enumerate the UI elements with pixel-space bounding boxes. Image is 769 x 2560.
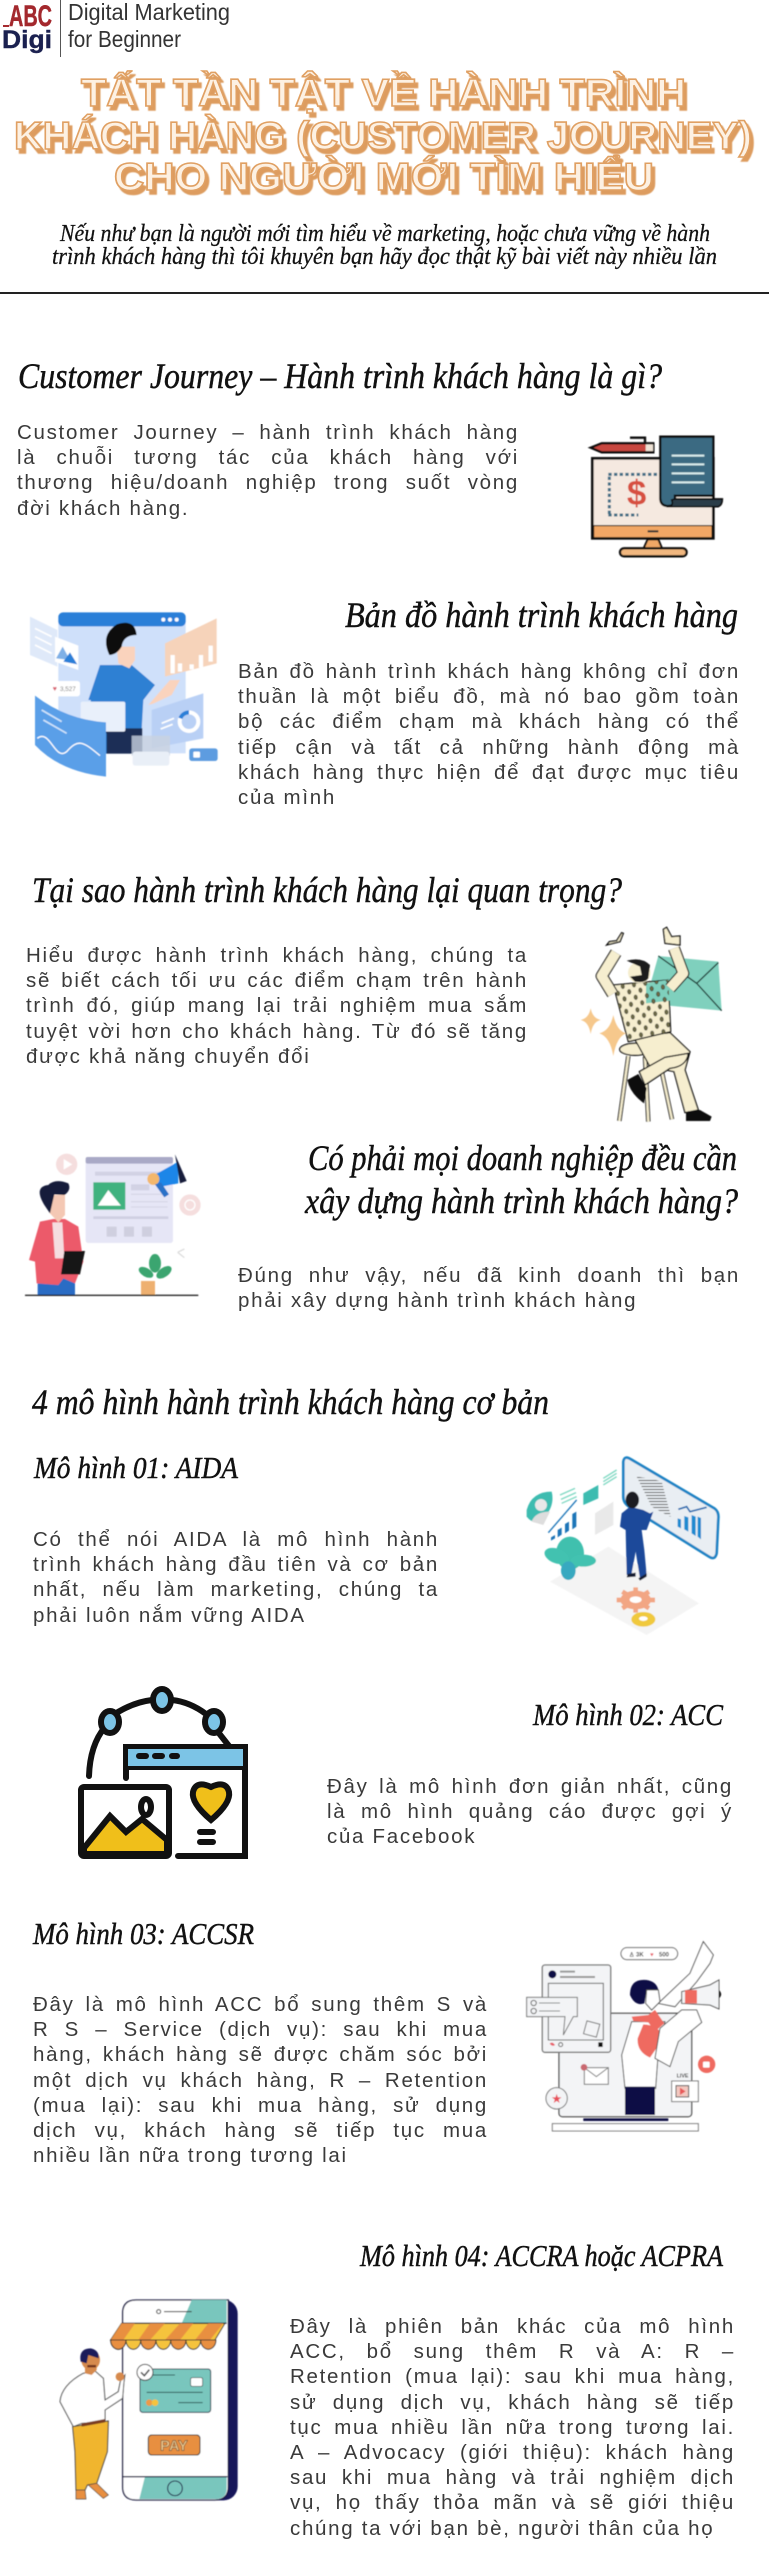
illustration: man with megaphone: ♥ — [650, 1952, 654, 1958]
text: model 02: là mô hình quảng cáo được gợi ý — [327, 1800, 733, 1823]
text: what is customer journey: Customer Journey – hành trình khách hàng — [17, 421, 519, 444]
logo: ABC — [9, 0, 52, 33]
illustration: isometric presenter and board — [527, 1458, 718, 1635]
text: model 01: Có thể nói AIDA là mô hình hành — [33, 1528, 439, 1551]
text: model 03: R S – Service (dịch vụ): sau khi mua — [33, 2018, 488, 2041]
text: why important: được khả năng chuyển đổi — [26, 1045, 311, 1068]
text: model 03: dịch vụ, khách hàng sẽ tiếp tục mua — [33, 2119, 488, 2142]
text: model 04: tục mua nhiều lần nữa trong tương lai. — [290, 2416, 735, 2439]
title: CHO NGƯỜI MỚI TÌM HIỂU — [114, 154, 654, 199]
text: model 01: phải luôn nắm vững AIDA — [33, 1604, 306, 1627]
text: customer journey map — [238, 660, 740, 809]
heading: model 01: Mô hình 01: AIDA — [33, 1450, 239, 1485]
logo — [2, 0, 230, 57]
text: model 04: sau khi mua hàng và trải nghiệm dịch — [290, 2466, 735, 2489]
logo: Digi — [2, 26, 52, 54]
illustration: man with megaphone — [527, 1942, 721, 2131]
illustration: man with megaphone: LIVE — [677, 2074, 689, 2080]
text: customer journey map: của mình — [238, 786, 336, 809]
title: TẤT TẦN TẬT VỀ HÀNH TRÌNH — [81, 71, 686, 115]
text: model 03 — [33, 1993, 488, 2167]
icon: monitor with invoice: $ — [627, 474, 646, 513]
text: model 03: (mua lại): sau khi mua hàng, sử dụng — [33, 2094, 488, 2117]
text: model 04: sử dụng dịch vụ, khách hàng sẽ tiếp — [290, 2391, 735, 2414]
text: model 04: A – Advocacy (giới thiệu): khách hàng — [290, 2441, 735, 2464]
heading: why important: Tại sao hành trình khách hàng lại quan trọng? — [32, 870, 622, 910]
heading: customer journey: Customer Journey – Hành trình khách hàng là gì? — [18, 356, 662, 396]
text: what is customer journey: đời khách hàng. — [17, 497, 189, 520]
text: model 04: Retention (mua lại): sau khi mua hàng, — [290, 2365, 735, 2388]
heading: model 03: Mô hình 03: ACCSR — [32, 1916, 254, 1951]
heading: every business — [304, 1138, 738, 1221]
text: model 03: hàng, khách hàng sẽ được chăm sóc bởi — [33, 2043, 488, 2066]
illustration: man with tablet and web page — [25, 1154, 201, 1296]
header divider — [0, 292, 769, 294]
text: what is customer journey — [17, 421, 519, 520]
text: model 02 — [327, 1775, 733, 1848]
subtitle: trình khách hàng thì tôi khuyên bạn hãy đọc thật kỹ bài viết này nhiều lần — [52, 244, 717, 270]
text: model 03: một dịch vụ khách hàng, R – Retention — [33, 2069, 488, 2092]
heading: model 02: Mô hình 02: ACC — [532, 1697, 723, 1732]
illustration: man with megaphone: ♙ 3K — [629, 1951, 644, 1958]
illustration: man with dashboards: ♥ — [53, 684, 57, 693]
text: model 04: chúng ta với bạn bè, người thân của họ — [290, 2516, 714, 2540]
text: every business: phải xây dựng hành trình khách hàng — [238, 1289, 637, 1312]
text: every business — [238, 1264, 740, 1312]
text: model 04 — [290, 2315, 735, 2540]
text: every business: Đúng như vậy, nếu đã kinh doanh thì bạn — [238, 1264, 740, 1287]
text: model 02: của Facebook — [327, 1825, 476, 1848]
illustration: phone store with man: PAY — [160, 2438, 188, 2454]
illustration: man with dashboards: 3,527 — [60, 686, 76, 693]
text: customer journey map: Bản đồ hành trình khách hàng không chỉ đơn — [238, 660, 740, 683]
text: customer journey map: thuần là một biểu đồ, mà nó bao gồm toàn — [238, 685, 740, 708]
heading: 4 models: 4 mô hình hành trình khách hàng cơ bản — [32, 1382, 549, 1422]
illustration: man with megaphone: 500 — [659, 1952, 670, 1958]
text: why important: sẽ biết cách tối ưu các điểm chạm trên hành — [26, 969, 528, 992]
title: KHÁCH HÀNG (CUSTOMER JOURNEY) — [14, 114, 752, 158]
text: why important: Hiểu được hành trình khách hàng, chúng ta — [26, 944, 528, 967]
text: model 04: Đây là phiên bản khác của mô hình — [290, 2315, 735, 2338]
illustration: man with megaphone: ★ — [551, 2091, 562, 2106]
title — [14, 71, 752, 199]
icon: web window and picture — [81, 1689, 245, 1856]
text: why important: tuyệt vời hơn cho khách hàng. Từ đó sẽ tăng — [26, 1020, 528, 1043]
illustration: man on stool pointing up — [581, 927, 722, 1122]
text: model 04: vụ, họ thấy thỏa mãn và sẽ giới thiệu — [290, 2491, 735, 2514]
text: customer journey map: khách hàng thực hiện để đạt được mục tiêu — [238, 761, 740, 784]
text: model 01: nhất, nếu làm marketing, chúng ta — [33, 1578, 439, 1601]
text: what is customer journey: là chuỗi tương tác của khách hàng với — [17, 446, 519, 469]
text: customer journey map: tiếp cận và tất cả những hành động mà — [238, 736, 740, 759]
icon: monitor with invoice — [591, 437, 722, 556]
text: model 03: nhiều lần nữa trong tương lai — [33, 2144, 348, 2167]
text: model 03: Đây là mô hình ACC bổ sung thêm S và — [33, 1993, 488, 2016]
text: model 04: ACC, bổ sung thêm R và A: R – — [290, 2340, 735, 2363]
subtitle — [52, 221, 717, 270]
logo: for Beginner — [68, 26, 181, 52]
text: what is customer journey: thương hiệu/doanh nghiệp trong suốt vòng — [17, 471, 519, 494]
text: why important — [26, 944, 528, 1068]
text: model 02: Đây là mô hình đơn giản nhất, cũng — [327, 1775, 733, 1798]
text: model 01: trình khách hàng đầu tiên và cơ bản — [33, 1553, 439, 1576]
text: model 01 — [33, 1528, 439, 1627]
illustration: phone store with man — [60, 2300, 238, 2500]
illustration: man with dashboards — [30, 612, 218, 777]
subtitle: Nếu như bạn là người mới tìm hiểu về marketing, hoặc chưa vững về hành — [59, 221, 710, 247]
text: why important: trình đó, giúp mang lại trải nghiệm mua sắm — [26, 994, 528, 1017]
text: customer journey map: bộ các điểm chạm mà khách hàng có thể — [238, 710, 740, 733]
